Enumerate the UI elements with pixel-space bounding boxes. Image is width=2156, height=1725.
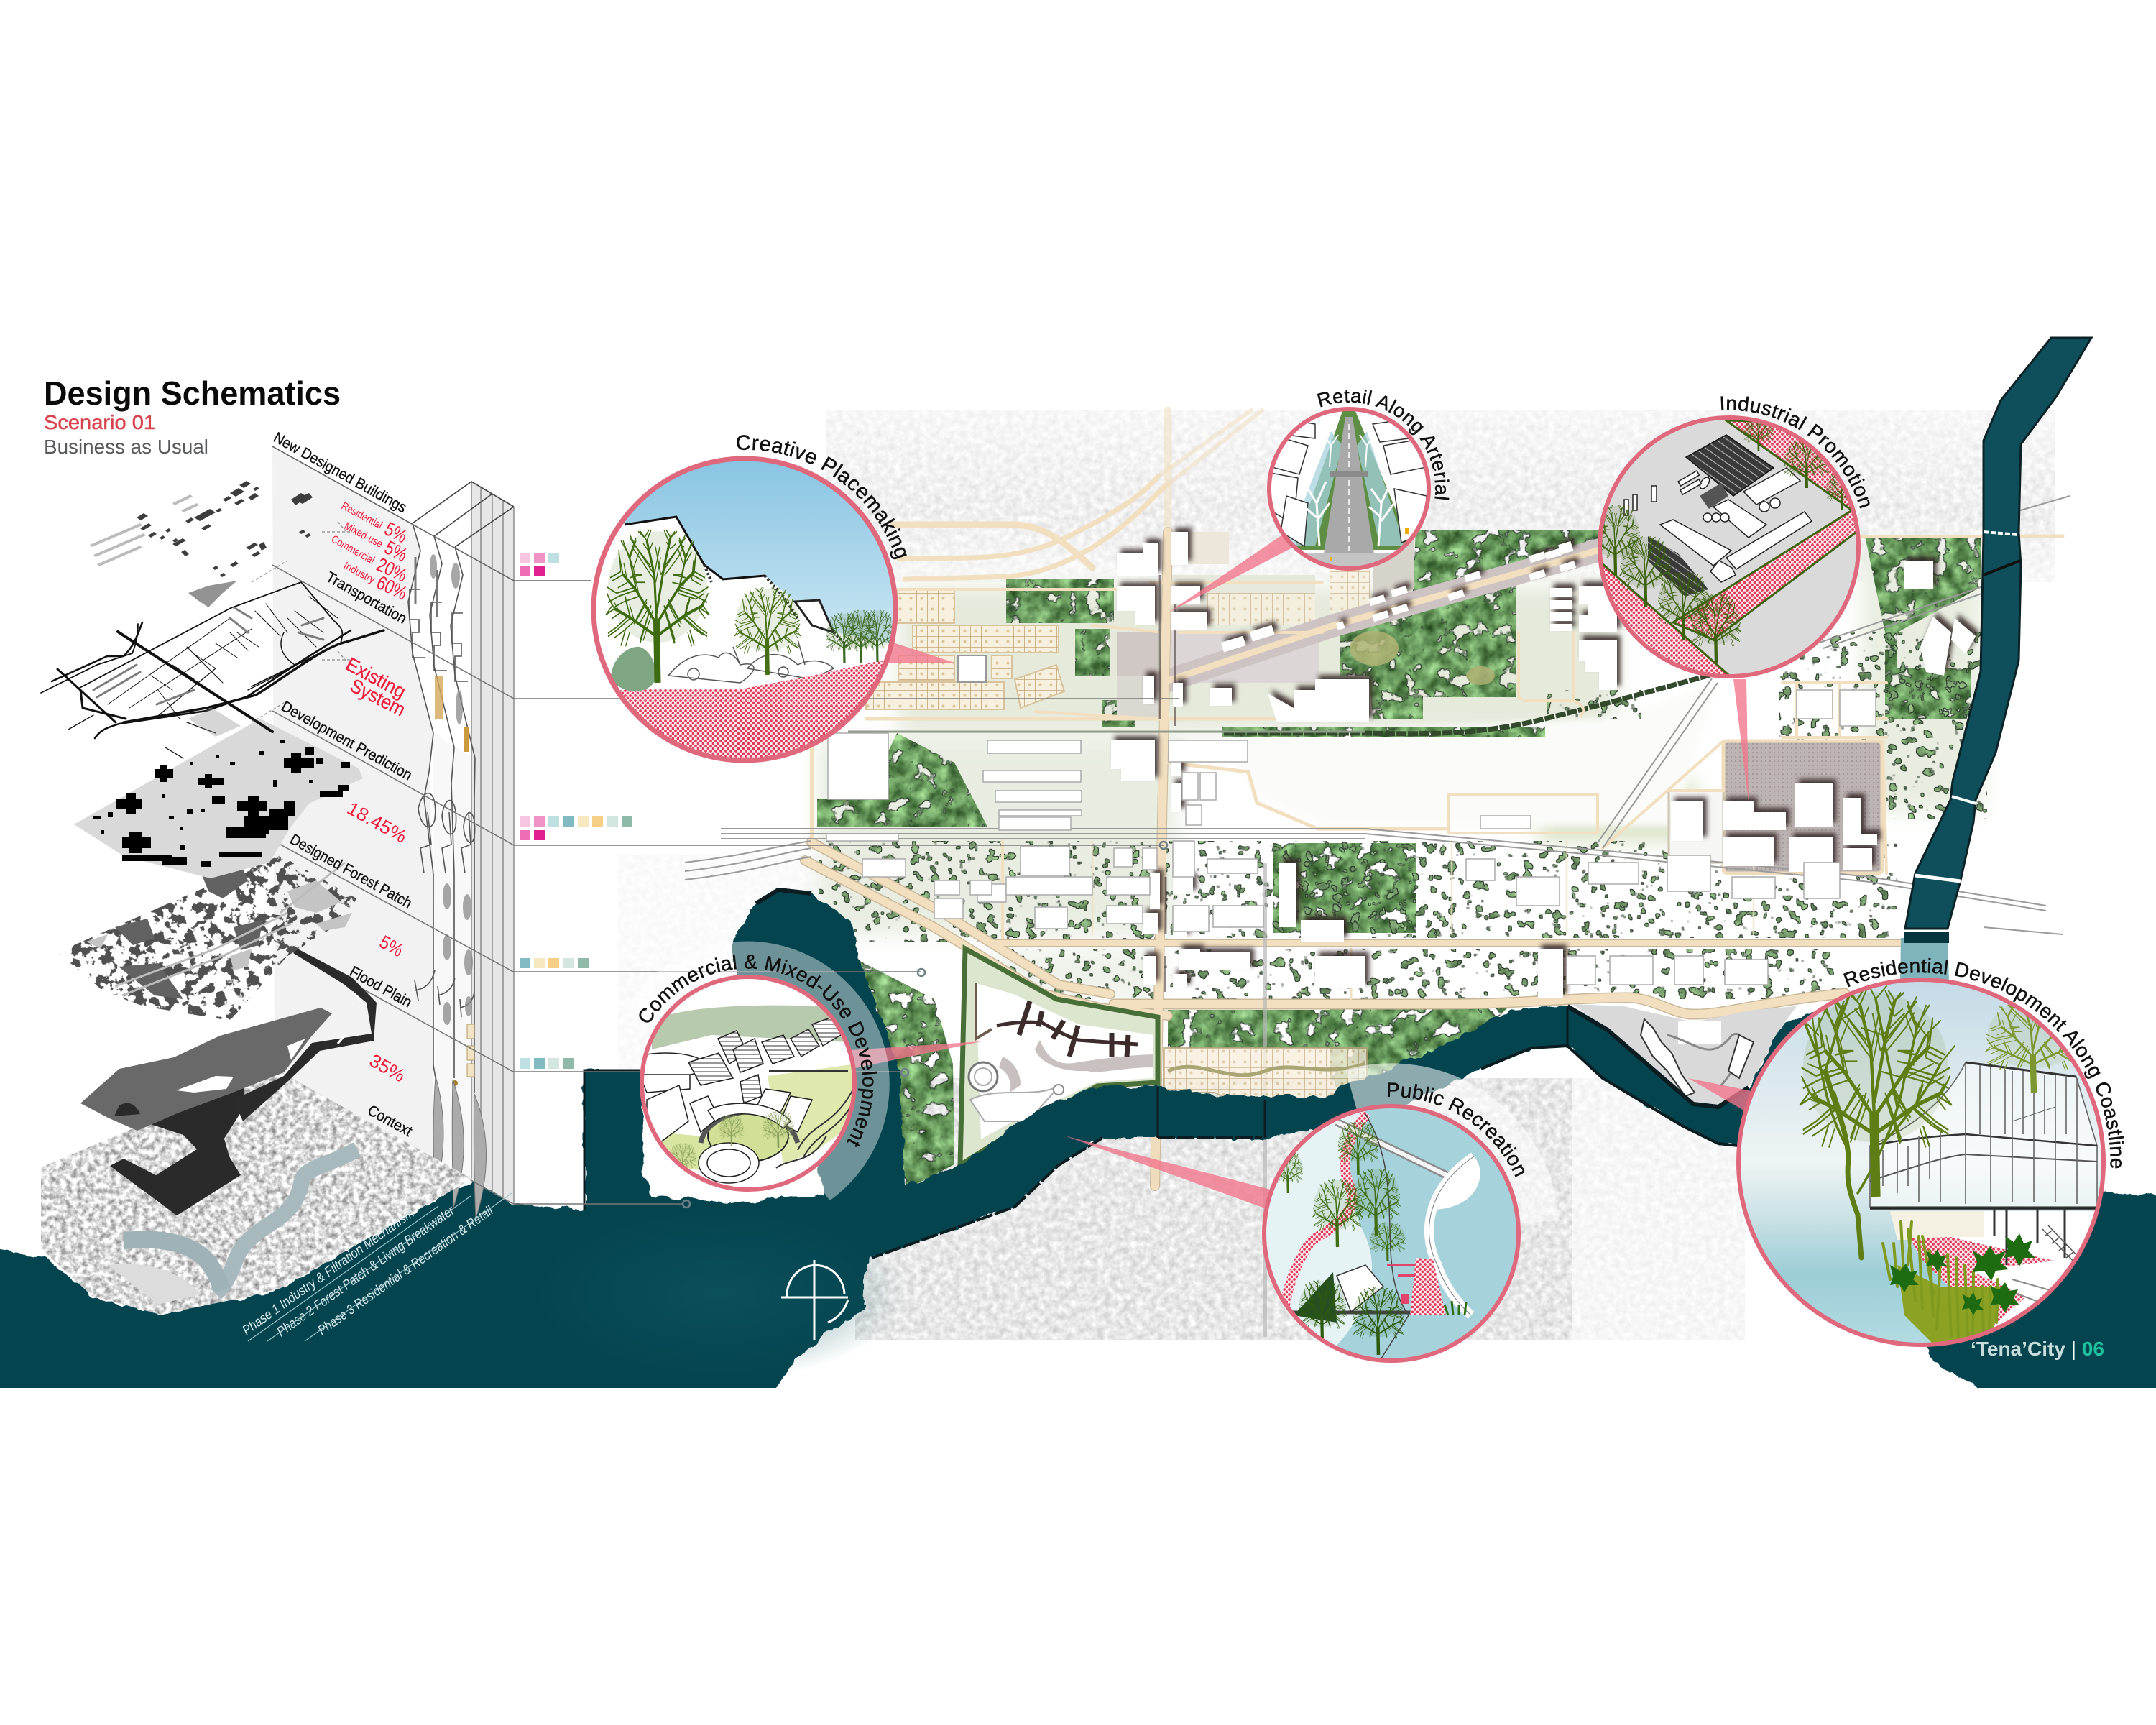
- commercial share: [329, 533, 410, 586]
- grey section wall: [272, 446, 472, 1179]
- callout: retail along arterial: Retail Along Arterial: [1317, 390, 1450, 500]
- sea and coastline: [0, 890, 2156, 1402]
- straw grass clearings: [1350, 631, 1495, 685]
- layer labels on the section wall: [271, 429, 415, 1140]
- forest patch share: 5%: [376, 931, 407, 961]
- phase 2: Phase 2 Forest Patch & Living Breakwater: [275, 1203, 458, 1340]
- scenario name: Business as Usual: [44, 436, 208, 458]
- white buildings with cast shadows: [1111, 532, 1976, 998]
- label: flood plain: Flood Plain: [347, 963, 415, 1011]
- residential share: Residential: [339, 500, 384, 532]
- land-use swatches: row 3: [520, 958, 589, 968]
- phase 1: Phase 1 Industry & Filtration Mechanism: [240, 1206, 417, 1338]
- layer: designed forest patch: [57, 855, 356, 1021]
- house structure: [1870, 1062, 2097, 1208]
- reeds: [1897, 1265, 2005, 1344]
- section profile lines: [408, 523, 475, 1092]
- industrial parcel block: [1669, 741, 1882, 873]
- faded satellite background: south of the coastline: [855, 1078, 1745, 1340]
- white industrial and residential footprints: [826, 690, 1876, 985]
- label: designed forest patch: Designed Forest Patch: [287, 831, 415, 911]
- callout: retail along arterial: [1267, 390, 1450, 571]
- label: transportation: Transportation: [323, 569, 410, 627]
- layer: context aerial: [41, 1069, 472, 1315]
- ring: [642, 977, 854, 1190]
- dark edge of riverside forest: [1224, 674, 1713, 734]
- callout halo: commercial: [641, 959, 872, 1186]
- coastal parcels: [1164, 1048, 1367, 1100]
- callout: commercial and mixed-use development: Commercial & Mixed-Use Development: [639, 954, 877, 1147]
- roads: [805, 532, 1904, 1186]
- residential share: [339, 500, 411, 547]
- site plan: [685, 410, 2070, 1337]
- curved label: [1386, 1097, 1527, 1221]
- existing system: System: [346, 675, 409, 721]
- tree: [1797, 985, 1955, 1258]
- industry share: Industry: [341, 560, 377, 586]
- callout: creative placemaking: [591, 435, 907, 763]
- land-use swatches: row 2: [520, 816, 632, 840]
- residential share: 5%: [381, 518, 411, 547]
- eastern river channel: [1900, 338, 2091, 981]
- heading: Design Schematics: [44, 374, 341, 412]
- phase labels: [240, 1193, 512, 1341]
- layer: development prediction: [74, 719, 363, 878]
- layer: transportation network: [41, 582, 384, 758]
- north arrow compass: [781, 1260, 848, 1340]
- curved label: [1720, 410, 1865, 535]
- section pile lenses: [433, 1076, 487, 1219]
- label: development prediction: Development Prediction: [279, 698, 415, 783]
- curved label: [1319, 402, 1435, 532]
- faded satellite background: west smudge: [618, 855, 819, 1071]
- pink callout wedges: [850, 535, 1759, 1208]
- commercial share: 20%: [373, 553, 410, 586]
- callout: creative placemaking: Creative Placemaking: [737, 435, 907, 559]
- plan ground washes: [817, 546, 1984, 999]
- waterfront park scene: [1261, 1103, 1524, 1366]
- axonometric campus: [626, 974, 859, 1193]
- dark street edges along the arterial: [1148, 575, 1175, 992]
- ring: [1264, 1106, 1519, 1361]
- curved label: [1847, 972, 2111, 1227]
- title block: [44, 374, 341, 458]
- sea tonal glow: [532, 1208, 906, 1380]
- mixed-use share: 5%: [381, 537, 411, 566]
- callout: public recreation: [1261, 1079, 1532, 1366]
- callout: residential development along coastline: [1736, 954, 2129, 1348]
- flood plain share: 35%: [366, 1049, 409, 1086]
- industry share: 60%: [373, 571, 410, 604]
- phase 3: Phase 3 Residential & Recreation & Retail: [315, 1203, 497, 1338]
- label: context: Context: [365, 1102, 415, 1140]
- land-use swatches: row 1: [520, 553, 559, 576]
- curved label: [648, 968, 862, 1164]
- curved label: [736, 450, 902, 581]
- land-use percentages: [329, 500, 411, 1086]
- layer: new designed buildings: [90, 481, 351, 722]
- industry share: [341, 560, 410, 604]
- section cut bands: [413, 482, 514, 1204]
- dense forest patches: [817, 530, 1981, 1190]
- ring: [594, 459, 895, 760]
- vignette scene: [605, 461, 893, 758]
- callout: industrial promotion: Industrial Promotion: [1720, 396, 1870, 509]
- page footer: ‘Tena’City | 06: [1971, 1338, 2104, 1360]
- scattered trees across the residential blocks: [819, 632, 1987, 999]
- ring: [1269, 409, 1429, 569]
- railway and secondary grey lines: [685, 496, 2070, 1337]
- coastline dark edge: [584, 890, 1749, 1258]
- land-use swatches: row 4: [520, 1058, 574, 1069]
- divider end markers: [683, 842, 1167, 1208]
- callout: public recreation: Public Recreation: [1387, 1082, 1525, 1177]
- house on stilts scene: [1736, 978, 2106, 1348]
- section wall and exploded layers: [41, 446, 1179, 1315]
- callout: industrial promotion: [1598, 396, 1870, 678]
- commercial share: Commercial: [329, 533, 377, 566]
- scenario number: Scenario 01: [44, 411, 155, 433]
- callout: residential development along coastline: Residential Development Along Coastline: [1841, 954, 2129, 1169]
- commercial and mixed-use development plot: [960, 949, 1158, 1165]
- axonometric factory yard: [1602, 420, 1856, 674]
- ring: [1738, 980, 2104, 1345]
- callout halo: public recreation: [1351, 1084, 1538, 1222]
- ring: [1600, 418, 1858, 676]
- layer: flood plain: [80, 949, 377, 1215]
- faded satellite background: north of the site: [826, 410, 2055, 582]
- development prediction share: 18.45%: [344, 797, 410, 847]
- layer divider lines: [272, 446, 1179, 1204]
- river corridor: [1215, 683, 1718, 827]
- street perspective: [1271, 411, 1427, 566]
- mixed-use share: [342, 520, 411, 566]
- straight lower edge of the sheet: [0, 1388, 2156, 1417]
- downtown blocks around the arterial: [1117, 521, 1414, 719]
- existing system: Existing: [342, 653, 410, 703]
- label: new designed buildings: New Designed Buildings: [271, 429, 410, 516]
- mixed-use share: Mixed-use: [342, 520, 384, 551]
- section planting and retail blocks: [430, 554, 474, 1086]
- creative placemaking parcels: [866, 590, 1064, 709]
- residential coast land: [1572, 1004, 1797, 1107]
